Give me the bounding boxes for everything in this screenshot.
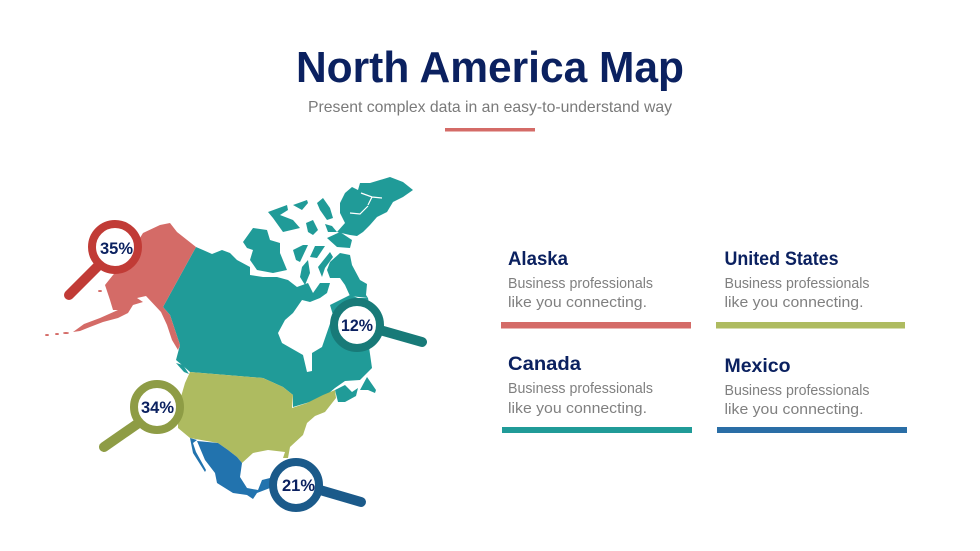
panel: Canada bbox=[502, 354, 692, 433]
magnifier: Alaska 35%: 35% bbox=[100, 239, 133, 258]
panel: Mexico: like you connecting. bbox=[724, 401, 864, 418]
magnifier: United States 34% bbox=[104, 384, 180, 447]
magnifier: Canada 12% bbox=[334, 302, 422, 348]
map of North America bbox=[45, 177, 413, 499]
panel: United States: Business professionals bbox=[724, 275, 870, 292]
fjords bbox=[350, 193, 382, 214]
panel: Alaska: like you connecting. bbox=[508, 294, 647, 311]
region: United States bbox=[178, 372, 336, 463]
panel: Alaska: Alaska bbox=[508, 249, 568, 270]
region: Alaska bbox=[45, 223, 196, 350]
panel: Mexico: Business professionals bbox=[724, 382, 870, 399]
panel: Alaska bbox=[501, 249, 691, 328]
panel: Canada: Canada bbox=[508, 354, 581, 375]
panel: United States: like you connecting. bbox=[724, 294, 864, 311]
region: Canada bbox=[163, 177, 413, 407]
panel: United States bbox=[716, 249, 905, 328]
magnifier: Mexico 21% bbox=[273, 462, 361, 508]
magnifier: United States 34%: 34% bbox=[141, 398, 174, 417]
magnifier: Canada 12%: 12% bbox=[341, 316, 373, 335]
title: North America Map bbox=[296, 43, 684, 92]
panel: Mexico: Mexico bbox=[724, 356, 790, 377]
panel: Canada: Business professionals bbox=[508, 380, 653, 397]
magnifier: Mexico 21%: 21% bbox=[282, 476, 315, 495]
title accent rule bbox=[445, 128, 535, 132]
panel: Alaska: Business professionals bbox=[508, 275, 653, 292]
magnifier: Alaska 35% bbox=[69, 224, 138, 295]
subtitle: Present complex data in an easy-to-understand way bbox=[308, 99, 672, 116]
panel: Mexico bbox=[717, 356, 907, 433]
region: Mexico bbox=[190, 438, 270, 499]
panel: Canada: like you connecting. bbox=[508, 400, 647, 417]
panel: United States: United States bbox=[724, 249, 838, 270]
